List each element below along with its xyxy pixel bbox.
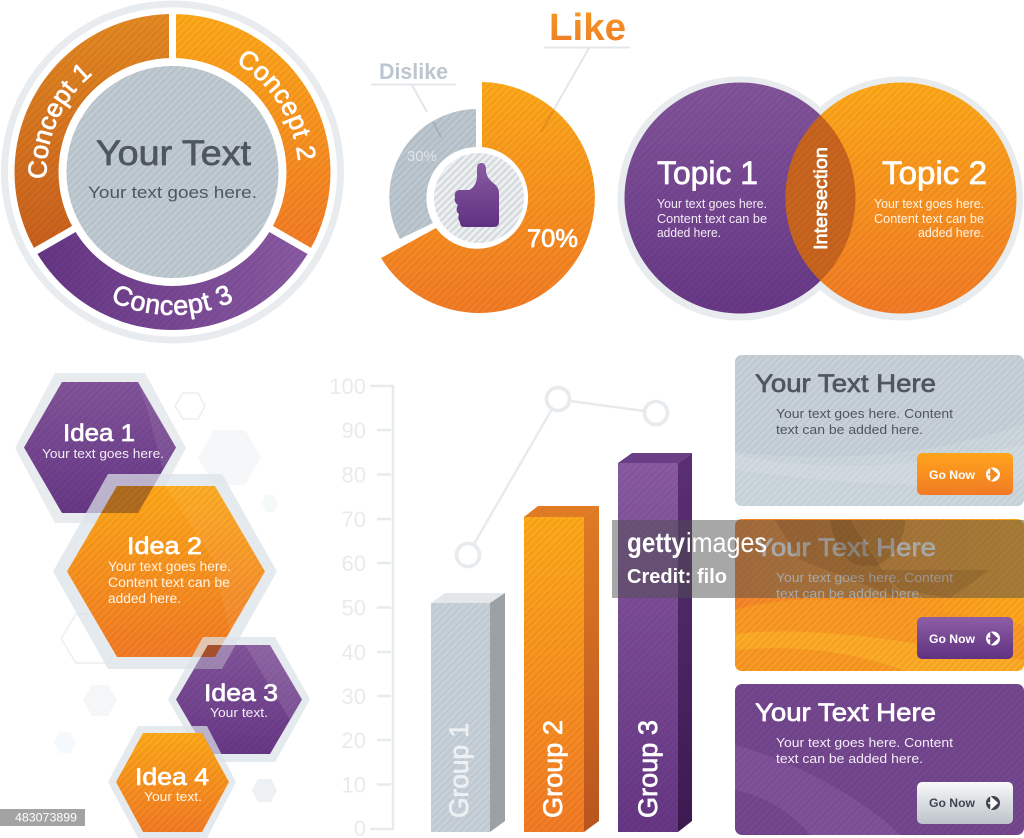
panel: orange banner bbox=[735, 519, 1024, 671]
button: go now orange bbox=[917, 453, 1013, 495]
donut slice: like 70%: 70% bbox=[527, 225, 578, 253]
segment: concept 2 bbox=[176, 14, 330, 248]
segment: concept 1 bbox=[14, 14, 169, 248]
segment: concept 3 bbox=[38, 232, 308, 330]
watermark: credit overlay: images bbox=[686, 527, 767, 558]
button: go now white bbox=[917, 782, 1013, 824]
label: dislike: Dislike bbox=[379, 59, 448, 84]
panel: concept circle diagram bbox=[1, 0, 344, 344]
circle: topic 1 bbox=[624, 82, 856, 314]
button: go now white: Go Now bbox=[929, 798, 975, 810]
intersection overlap: Intersection bbox=[811, 147, 831, 250]
panel: gray banner bbox=[735, 355, 1024, 506]
donut slice: dislike 30%: 30% bbox=[407, 148, 437, 165]
intersection overlap bbox=[786, 115, 856, 281]
y axis with scale: 20 bbox=[342, 728, 366, 753]
circle: topic 2: Your text goes here. bbox=[874, 197, 984, 211]
panel: like dislike donut chart bbox=[371, 7, 630, 313]
watermark: credit overlay: Credit: filo bbox=[627, 566, 727, 588]
panel: purple banner bbox=[735, 684, 1024, 835]
y axis with scale: 40 bbox=[342, 640, 366, 665]
circle: topic 1: Topic 1 bbox=[657, 155, 758, 191]
hexagon: idea 2: added here. bbox=[108, 591, 181, 606]
bar: group 2 bbox=[524, 506, 599, 832]
circle: topic 2 bbox=[786, 82, 1016, 314]
panel: venn diagram bbox=[618, 76, 1023, 320]
circle: topic 2: Content text can be bbox=[874, 212, 984, 226]
panel: purple banner: Your Text Here bbox=[755, 699, 936, 727]
bar: group 1 bbox=[431, 593, 505, 832]
watermark: credit overlay: getty bbox=[627, 527, 685, 558]
hexagon: idea 2: Your text goes here. bbox=[108, 559, 231, 574]
center text disc: Your text goes here. bbox=[88, 183, 257, 202]
y axis with scale: 30 bbox=[342, 684, 366, 709]
bar: group 3 bbox=[618, 453, 692, 832]
button: go now purple: Go Now bbox=[929, 634, 975, 646]
bar: group 3: Group 3 bbox=[633, 720, 663, 818]
y axis with scale: 70 bbox=[342, 507, 366, 532]
hexagon: idea 3: Your text. bbox=[210, 706, 268, 720]
hexagon: idea 4 bbox=[108, 726, 236, 838]
button: go now purple bbox=[917, 617, 1013, 659]
label: like bbox=[544, 7, 630, 111]
bar: group 2: Group 2 bbox=[538, 720, 568, 818]
panel: orange banner: Your text goes here. Content bbox=[776, 571, 954, 585]
panel: orange banner: text can be added here. bbox=[776, 587, 923, 601]
y axis with scale: 50 bbox=[342, 596, 366, 620]
hexagon: idea 1: Idea 1 bbox=[63, 420, 135, 447]
donut slice: like 70% bbox=[381, 82, 595, 313]
center text disc: Your Text bbox=[96, 134, 251, 173]
y axis with scale: 60 bbox=[342, 551, 366, 576]
panel: gray banner: text can be added here. bbox=[776, 423, 923, 437]
watermark: credit overlay bbox=[612, 520, 1024, 598]
hexagon: idea 1: Your text goes here. bbox=[42, 447, 164, 461]
hexagon: idea 2 bbox=[53, 474, 277, 669]
circle: topic 1: Your text goes here. bbox=[657, 197, 767, 211]
hexagon: idea 4: Idea 4 bbox=[135, 764, 209, 791]
image id tag: 483073899 bbox=[15, 812, 77, 824]
y axis with scale: 80 bbox=[342, 462, 366, 488]
panel: purple banner: Your text goes here. Content bbox=[776, 736, 954, 750]
donut slice: dislike 30% bbox=[389, 109, 476, 239]
panel: idea hexagons bbox=[0, 373, 310, 838]
trend line with markers bbox=[456, 388, 668, 566]
hexagon: idea 3: Idea 3 bbox=[204, 680, 278, 707]
hexagon: idea 2: Idea 2 bbox=[127, 533, 202, 560]
y axis with scale: 100 bbox=[329, 374, 366, 399]
panel: gray banner: Your text goes here. Content bbox=[776, 407, 954, 421]
label: dislike bbox=[371, 59, 456, 112]
label: like: Like bbox=[549, 7, 626, 49]
segment: concept 2: Concept 2 bbox=[240, 51, 316, 160]
panel: orange banner: Your Text Here bbox=[755, 534, 936, 562]
hexagon: idea 1 bbox=[15, 373, 186, 523]
panel: bar chart bbox=[329, 374, 692, 838]
circle: topic 2: Topic 2 bbox=[882, 155, 987, 191]
y axis with scale bbox=[329, 374, 393, 838]
icon: thumbs up bbox=[455, 163, 499, 227]
center hatched disc bbox=[434, 153, 524, 243]
center text disc bbox=[66, 66, 278, 278]
button: go now orange: Go Now bbox=[929, 470, 975, 482]
segment: concept 3: Concept 3 bbox=[114, 286, 232, 320]
hexagon: idea 2: Content text can be bbox=[108, 575, 230, 590]
segment: concept 1: Concept 1 bbox=[28, 64, 92, 178]
hexagon: idea 4: Your text. bbox=[144, 790, 202, 804]
image id tag bbox=[0, 809, 85, 826]
bar: group 1: Group 1 bbox=[444, 723, 474, 818]
y axis with scale: 90 bbox=[342, 418, 366, 443]
decorative background hexagons bbox=[54, 393, 278, 802]
circle: topic 1: added here. bbox=[657, 226, 721, 240]
y axis with scale: 10 bbox=[342, 772, 366, 798]
hexagon: idea 3 bbox=[168, 637, 310, 762]
circle: topic 1: Content text can be bbox=[657, 212, 767, 226]
circle: topic 2: added here. bbox=[918, 226, 984, 240]
panel: gray banner: Your Text Here bbox=[755, 370, 936, 398]
panel: purple banner: text can be added here. bbox=[776, 752, 923, 766]
